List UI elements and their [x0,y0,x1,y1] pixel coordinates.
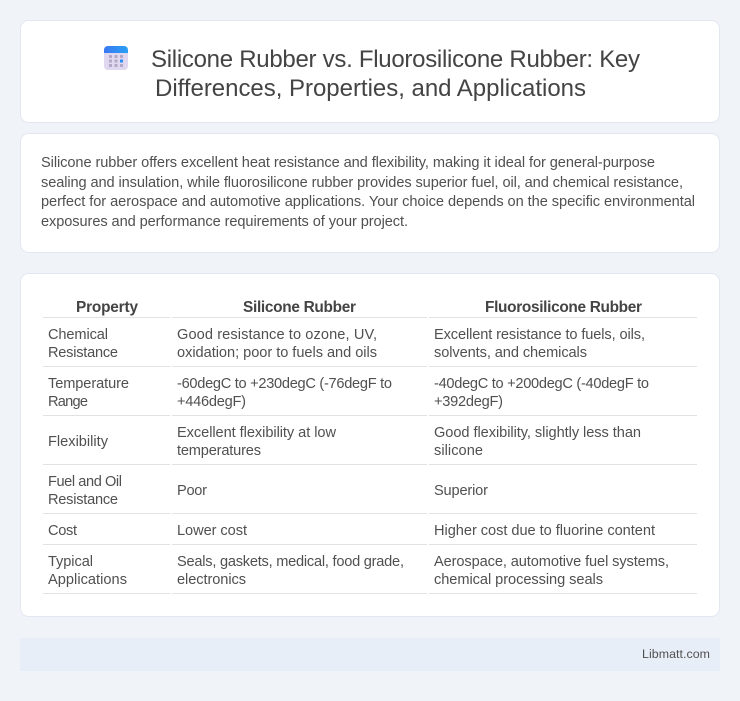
row: fuel and oil resistance: Resistance [48,492,118,508]
row: typical applications: chemical processing seals [434,572,603,588]
row: temperature range: -60degC to +230degC (-76degF to [177,376,392,392]
row: flexibility [48,425,641,459]
row: fuel and oil resistance: Poor [177,483,207,499]
row: chemical resistance: Resistance [48,345,118,361]
row: typical applications: Applications [48,572,127,588]
text block: summary paragraph: Silicone rubber offers excellent heat resistance and flexibility, making it ideal for general-purpose [41,155,655,171]
row: temperature range: -40degC to +200degC (-40degF to [434,376,649,392]
row: chemical resistance: solvents, and chemicals [434,345,587,361]
text block: summary paragraph: exposures and performance requirements of your project. [41,214,408,230]
row: typical applications: electronics [177,572,246,588]
row: temperature range [48,376,649,410]
panel: summary [20,134,720,252]
text block: summary paragraph: sealing and insulation, while fluorosilicone rubber provides superior fuel, oil, and chemical resistance, [41,175,683,191]
row: flexibility: Good flexibility, slightly less than [434,425,641,441]
row: fuel and oil resistance: Fuel and Oil [48,474,122,490]
table header row: Silicone Rubber [243,299,356,316]
row: temperature range: Temperature [48,376,129,392]
title [151,46,640,102]
row: cost: Cost [48,523,77,539]
row: cost: Lower cost [177,523,247,539]
text block: summary paragraph: perfect for aerospace and automotive applications. Your choice depends on the specific environmental [41,194,695,210]
row: fuel and oil resistance: Superior [434,483,488,499]
table header row: Fluorosilicone Rubber [485,299,642,316]
row: chemical resistance: Excellent resistance to fuels, oils, [434,327,645,343]
title: Differences, Properties, and Applications [155,75,586,102]
footer [20,638,720,671]
row: typical applications [48,554,669,588]
row: typical applications: Typical [48,554,93,570]
title: Silicone Rubber vs. Fluorosilicone Rubber: Key [151,46,640,73]
table header row [76,299,642,316]
row: temperature range: Range [48,394,88,410]
row: typical applications: Aerospace, automotive fuel systems, [434,554,669,570]
row: cost: Higher cost due to fluorine content [434,523,655,539]
row: flexibility: Excellent flexibility at low [177,425,336,441]
row: chemical resistance: Chemical [48,327,108,343]
row: temperature range: +446degF) [177,394,246,410]
row: chemical resistance: Good resistance to ozone, UV, [177,327,377,343]
row: flexibility: temperatures [177,443,261,459]
row: flexibility: Flexibility [48,434,109,450]
row: typical applications: Seals, gaskets, medical, food grade, [177,554,404,570]
icon: calendar [104,46,128,70]
row: cost [48,523,655,539]
row: chemical resistance: oxidation; poor to fuels and oils [177,345,377,361]
panel: comparison table [20,274,720,616]
row: flexibility: silicone [434,443,483,459]
row: chemical resistance [48,327,645,361]
panel: title card [20,20,720,122]
row: temperature range: +392degF) [434,394,503,410]
row: fuel and oil resistance [48,474,488,508]
table header row: Property [76,299,138,316]
footer: Libmatt.com [642,647,710,661]
text block: summary paragraph [41,155,695,230]
